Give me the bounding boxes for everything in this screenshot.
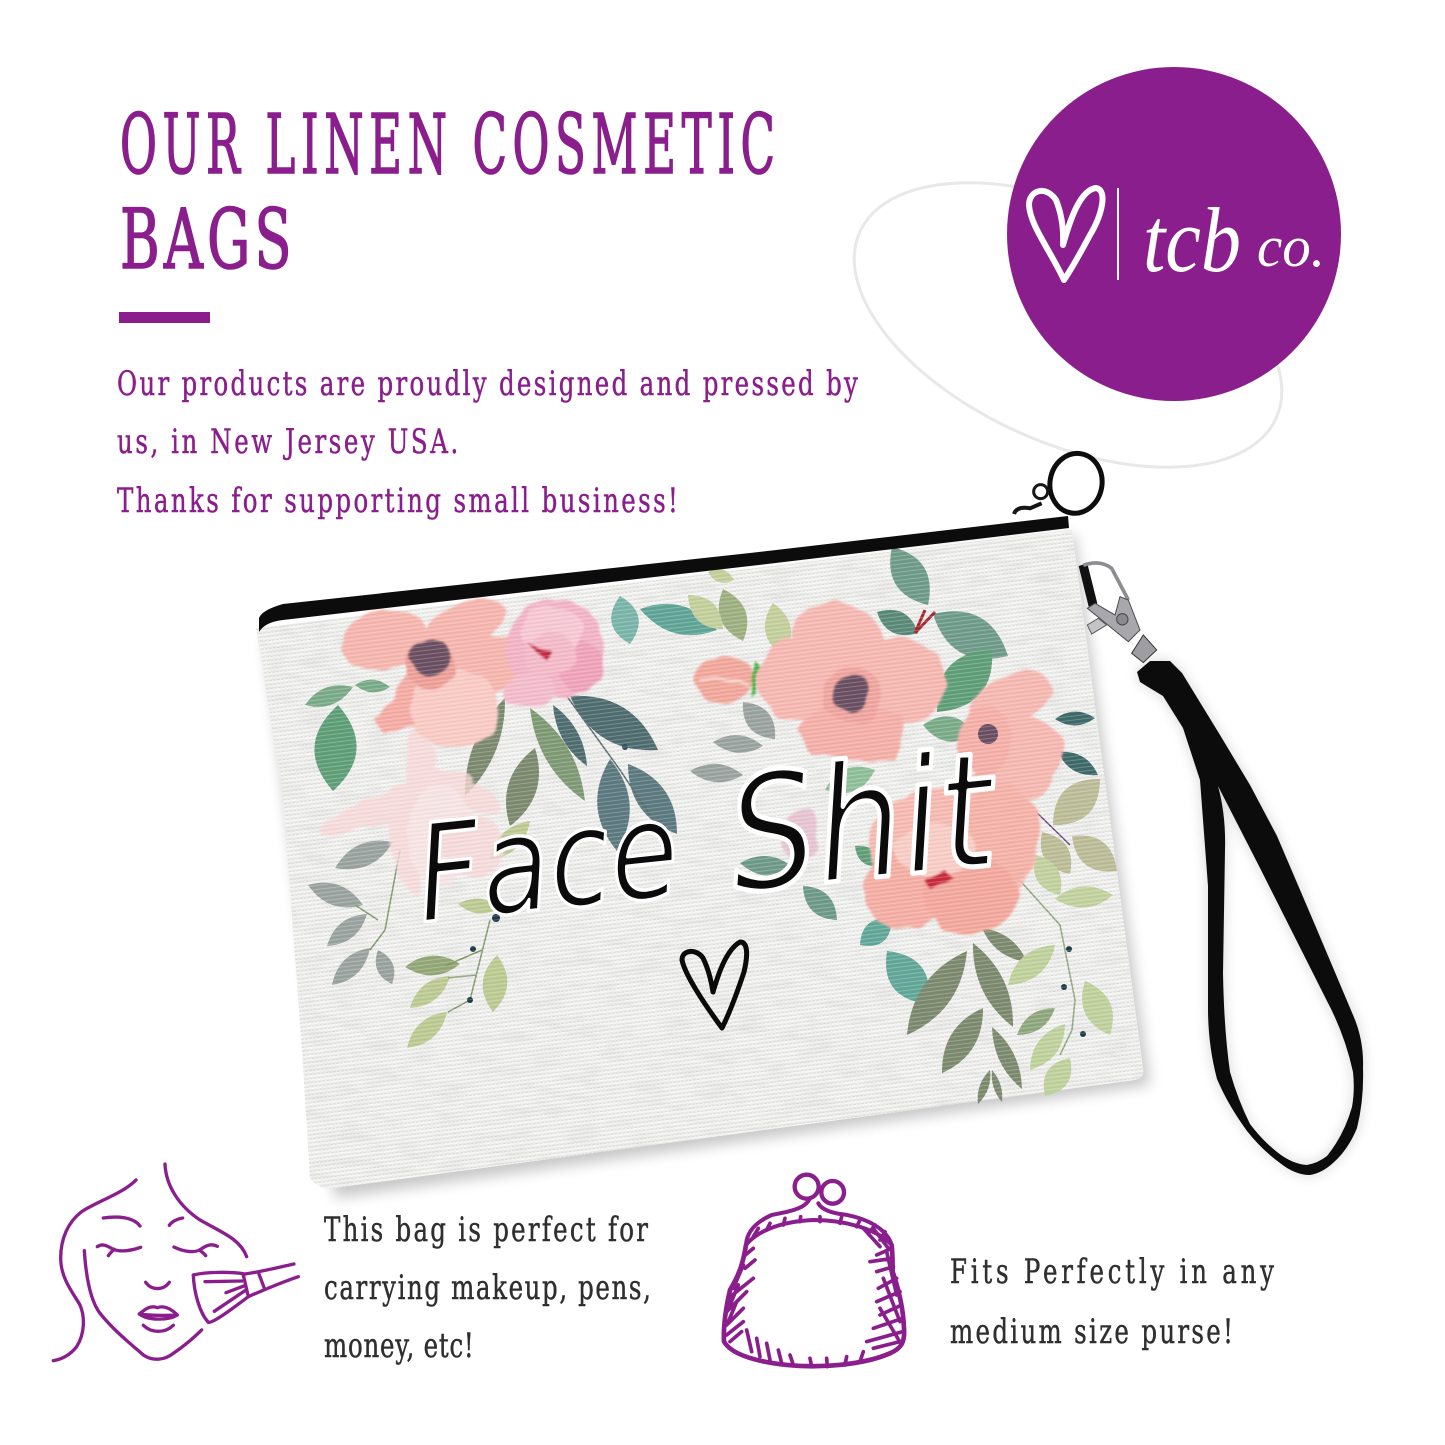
logo wordmark: co.	[1257, 214, 1325, 279]
olive drooping leaves	[895, 922, 1032, 1105]
bag lettering	[409, 716, 1007, 954]
coral flower two	[959, 660, 1063, 811]
decorative orbit ellipse	[812, 124, 1324, 526]
teal lower leaves	[853, 911, 942, 1014]
icon: bag heart	[682, 942, 747, 1028]
purse hatching	[727, 1217, 903, 1367]
coral flower one	[758, 589, 947, 760]
title underline bar	[119, 312, 210, 323]
flower centre two	[834, 675, 870, 713]
top leaves	[872, 538, 1018, 745]
silver clasp	[1083, 563, 1157, 663]
linen mottling	[271, 545, 1128, 1183]
linen bag body	[250, 510, 1150, 1200]
title	[120, 97, 775, 288]
green leaves	[302, 679, 390, 792]
pink rose	[505, 598, 604, 708]
pale olive leaves by bud	[680, 566, 796, 658]
slate leaves	[546, 681, 689, 852]
grey leaves	[304, 832, 400, 992]
intro text block	[117, 364, 858, 520]
purse outline	[724, 1175, 904, 1366]
stems and berries	[915, 610, 1086, 1055]
bag lettering: Shit	[719, 716, 1007, 930]
title: OUR LINEN COSMETIC	[120, 97, 775, 193]
coral rose	[862, 785, 1040, 935]
tulip bud	[693, 657, 762, 701]
small ring and hook	[1014, 485, 1048, 514]
dark teal leaves	[1054, 711, 1102, 782]
intro text block: Our products are proudly designed and pressed by	[117, 364, 858, 403]
makeup text: money, etc!	[324, 1326, 474, 1365]
bag lettering: Face	[409, 770, 686, 954]
coral poppy flower	[336, 586, 533, 748]
teal leaves	[607, 593, 720, 647]
makeup text: This bag is perfect for	[324, 1210, 649, 1249]
purse text	[950, 1252, 1274, 1351]
key ring	[1045, 449, 1107, 517]
strap shadow	[1137, 661, 1363, 1175]
floral art right	[680, 538, 1126, 1105]
strap tab	[1079, 563, 1097, 607]
wrist strap	[1137, 661, 1363, 1175]
floral art left	[302, 586, 762, 1055]
logo badge	[1007, 67, 1341, 401]
intro text block: Thanks for supporting small business!	[117, 481, 678, 520]
berries and stems	[355, 695, 650, 1012]
light lower leaves	[1000, 936, 1122, 1102]
light green leaves	[401, 814, 537, 1055]
bag shadow	[265, 535, 1150, 1198]
icon: face with makeup brush	[53, 1164, 298, 1361]
fabric weave over print	[256, 530, 1143, 1188]
purse text: Fits Perfectly in any	[950, 1252, 1274, 1291]
olive leaves	[454, 694, 596, 830]
small pink bud	[782, 810, 818, 860]
centre grey leaves	[689, 694, 784, 784]
intro text block: us, in New Jersey USA.	[117, 422, 458, 461]
icon: logo heart	[1029, 188, 1103, 280]
pale pink chrysanthemum	[314, 728, 512, 897]
pale olive leaves	[1025, 767, 1126, 910]
makeup text	[324, 1210, 651, 1365]
logo wordmark	[1143, 189, 1325, 291]
zipper	[259, 516, 1069, 632]
title: BAGS	[120, 194, 292, 288]
flower centre three	[978, 724, 998, 744]
metal hardware	[1014, 449, 1157, 663]
flower centre	[409, 640, 451, 674]
icon: coin purse	[724, 1175, 904, 1367]
makeup text: carrying makeup, pens,	[324, 1268, 651, 1307]
logo divider	[1117, 188, 1119, 280]
leaves near lettering	[739, 759, 885, 928]
logo wordmark: tcb	[1143, 189, 1241, 291]
purse text: medium size purse!	[950, 1312, 1233, 1351]
